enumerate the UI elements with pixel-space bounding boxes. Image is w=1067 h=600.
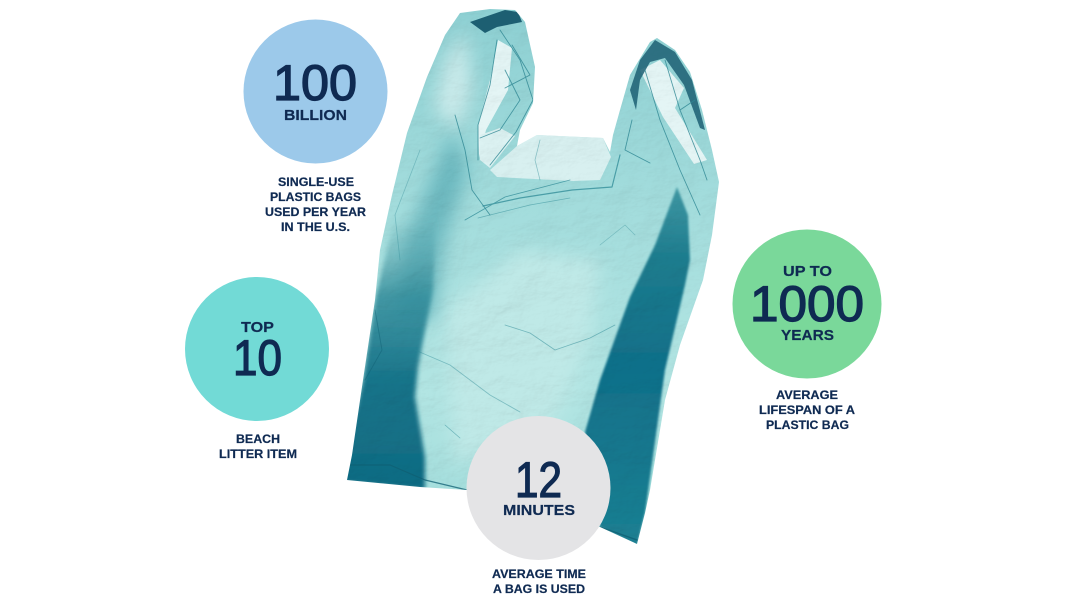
blue circle [244,20,388,164]
caption [219,434,297,461]
stat: 100 billion [244,20,388,234]
value: 12 [515,452,562,508]
caption: A BAG IS USED [493,584,585,596]
unit: MINUTES [503,502,575,519]
caption: AVERAGE [776,390,838,402]
left dark panel [347,225,436,488]
caption: LIFESPAN OF A [759,405,855,417]
pale gap below left handle [480,128,515,168]
caption [492,569,586,596]
value: 100 [273,55,357,111]
caption: BEACH [236,434,280,446]
caption [265,177,367,234]
caption: LITTER ITEM [219,449,297,461]
handle dark tops [470,10,522,33]
gray circle [466,416,610,560]
caption: AVERAGE TIME [492,569,586,581]
label: TOP [241,319,274,336]
unit: BILLION [284,107,347,124]
right dark panel [585,187,690,546]
stat: 12 minutes [466,416,610,596]
photo: translucent plastic bag [340,0,730,560]
caption: PLASTIC BAGS [270,192,361,204]
caption: IN THE U.S. [281,222,350,234]
diagonal shadow on left arm [395,130,468,320]
crumple texture [394,26,706,470]
light patch on left handle [435,30,472,130]
back panel seen through handle gap [490,135,611,181]
green circle [732,230,882,378]
teal circle [185,277,329,421]
label: UP TO [783,263,832,280]
stat: up to 1000 years [732,230,882,432]
handle folds [455,30,707,215]
handle openings [478,40,512,158]
value: 1000 [750,276,864,332]
light patch in body [445,250,600,465]
value: 10 [233,330,282,386]
caption: USED PER YEAR [265,207,367,219]
caption: PLASTIC BAG [766,420,849,432]
body creases [350,140,637,540]
caption: SINGLE-USE [278,177,354,189]
stat: top 10 [185,277,329,461]
unit: YEARS [781,327,834,344]
caption [759,390,855,432]
